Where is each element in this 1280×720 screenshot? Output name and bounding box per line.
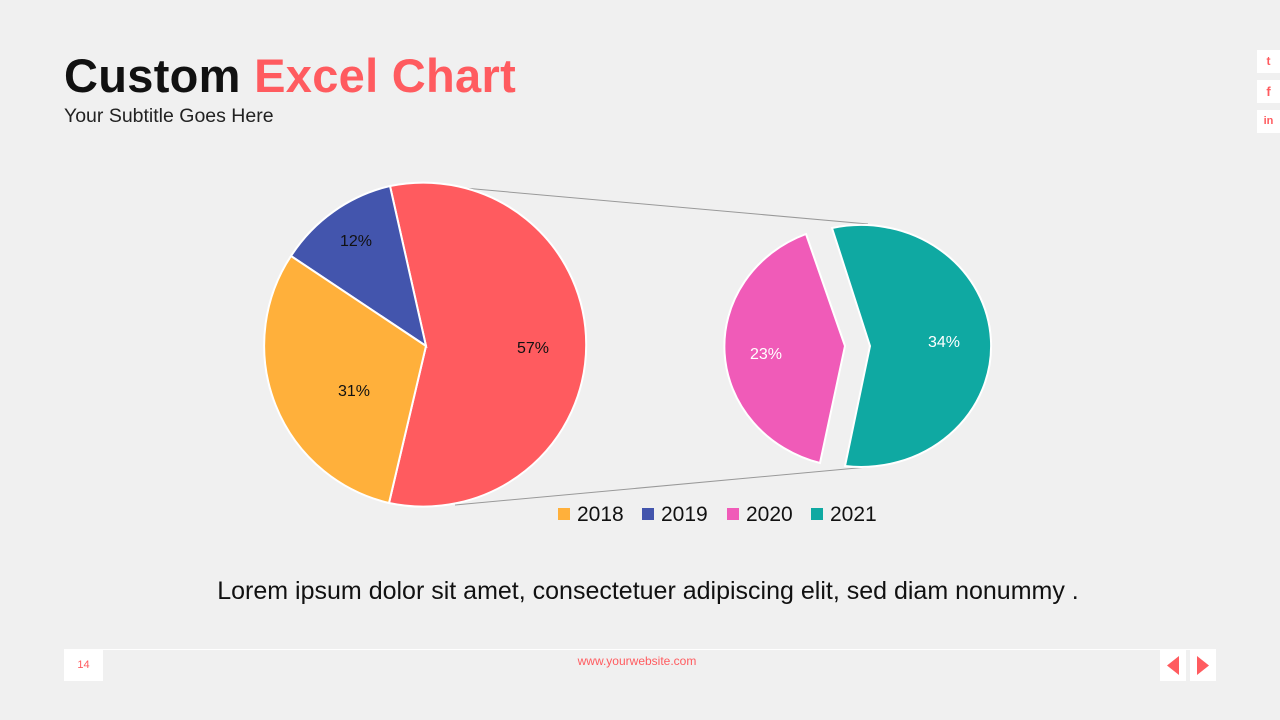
pie: main: 12% bbox=[340, 233, 372, 250]
footer line bbox=[64, 649, 1216, 650]
icon: next arrow bbox=[1190, 650, 1216, 681]
legend: 2019 bbox=[661, 503, 708, 526]
legend: 2021 bbox=[830, 503, 877, 526]
nav arrows bbox=[1160, 650, 1216, 681]
icon: linkedin bbox=[1257, 110, 1280, 133]
legend: 2020 bbox=[746, 503, 793, 526]
page number bbox=[64, 650, 103, 681]
subtitle: Your Subtitle Goes Here bbox=[64, 105, 274, 127]
pie: main: 31% bbox=[338, 383, 370, 400]
pie: breakout: 34% bbox=[928, 334, 960, 351]
icon: linkedin: in bbox=[1264, 115, 1273, 127]
pie: breakout bbox=[724, 225, 991, 467]
pie: main bbox=[264, 183, 586, 507]
connector lines bbox=[430, 185, 868, 505]
website: www.yourwebsite.com bbox=[578, 654, 696, 668]
icon: prev arrow bbox=[1160, 650, 1186, 681]
body text: Lorem ipsum dolor sit amet, consectetuer adipiscing elit, sed diam nonummy . bbox=[217, 577, 1079, 605]
legend: 2018 bbox=[577, 503, 624, 526]
legend bbox=[558, 503, 877, 526]
page number: 14 bbox=[77, 659, 90, 671]
pie: breakout: 23% bbox=[750, 346, 782, 363]
icon: facebook: f bbox=[1266, 84, 1271, 99]
social icons bbox=[1257, 50, 1280, 133]
icon: twitter bbox=[1257, 50, 1280, 73]
icon: twitter: t bbox=[1266, 54, 1270, 68]
pie: main: 57% bbox=[517, 340, 549, 357]
icon: facebook bbox=[1257, 80, 1280, 103]
title: Custom Excel Chart bbox=[64, 49, 516, 102]
